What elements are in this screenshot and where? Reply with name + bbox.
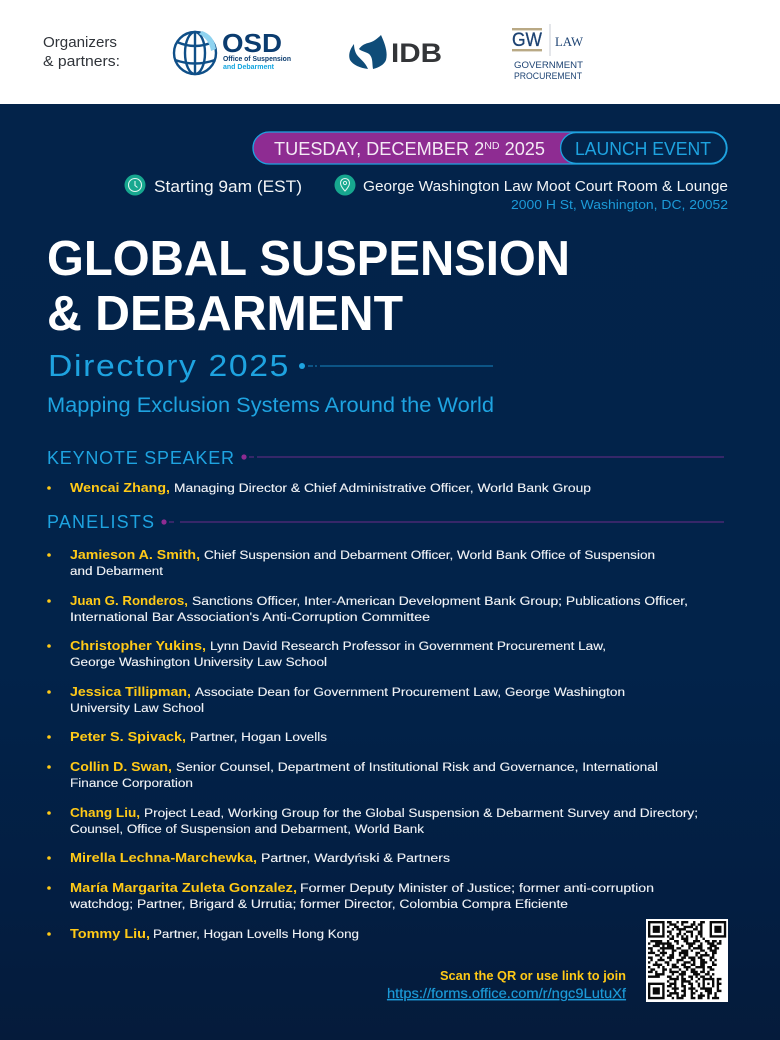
panelist: Mirella Lechna-Marchewka: [47, 851, 450, 865]
panelist: Christopher Yukins: [47, 639, 606, 669]
panelist: Jamieson A. Smith: [47, 548, 655, 578]
panelist: Tommy Liu: Partner, Hogan Lovells Hong Kong: [153, 927, 359, 941]
panelist: Collin D. Swan: Collin D. Swan,: [70, 760, 172, 774]
logo: OSD: and Debarment: [223, 62, 274, 71]
panelist: Peter S. Spivack: Peter S. Spivack,: [70, 730, 186, 744]
panelist: Juan G. Ronderos: International Bar Association's Anti-Corruption Committee: [70, 610, 430, 624]
logo: GW Law Government Procurement: GOVERNMENT: [514, 60, 583, 71]
panelist: Tommy Liu: Tommy Liu,: [70, 927, 150, 941]
panelist: Juan G. Ronderos: Juan G. Ronderos,: [70, 594, 188, 608]
logo: GW Law Government Procurement: PROCUREMENT: [514, 71, 582, 82]
panelist: Jamieson A. Smith: and Debarment: [70, 564, 164, 578]
venue: George Washington Law Moot Court Room & Lounge: [363, 178, 728, 195]
panelist: Juan G. Ronderos: [47, 594, 688, 624]
panelist: Christopher Yukins: Lynn David Research Professor in Government Procurement Law,: [210, 639, 606, 653]
keynote entry: Managing Director & Chief Administrative Officer, World Bank Group: [174, 481, 591, 495]
heading: panelists: PANELISTS: [47, 512, 154, 532]
subtitle: directory 2025: [48, 348, 493, 383]
panelist: Chang Liu: Project Lead, Working Group for the Global Suspension & Debarment Survey and Directory;: [144, 806, 698, 820]
panelist: Juan G. Ronderos: Sanctions Officer, Inter-American Development Bank Group; Publications Officer,: [192, 594, 688, 608]
logo: IDB: [349, 35, 442, 69]
organizers label: Organizers: [43, 35, 117, 51]
organizers label: & partners:: [43, 54, 120, 70]
call to action: https://forms.office.com/r/ngc9LutuXf: [387, 985, 626, 1001]
panelist: Chang Liu: Chang Liu,: [70, 806, 140, 820]
logo: OSD: Office of Suspension: [223, 54, 291, 63]
panelist: Peter S. Spivack: [47, 730, 327, 744]
panelist: María Margarita Zuleta Gonzalez: María Margarita Zuleta Gonzalez,: [70, 881, 297, 895]
date and launch pill: LAUNCH EVENT: [575, 139, 711, 159]
date and launch pill: TUESDAY, DECEMBER 2: [274, 139, 482, 159]
panelist: María Margarita Zuleta Gonzalez: watchdog; Partner, Brigard & Urrutia; former Director, Colombia Compra Eficiente: [69, 897, 568, 911]
logo: IDB: IDB: [391, 38, 442, 68]
panelist: Chang Liu: Counsel, Office of Suspension and Debarment, World Bank: [70, 822, 425, 836]
panelist: Jessica Tillipman: University Law School: [70, 701, 204, 715]
panelist: Mirella Lechna-Marchewka: Partner, Wardyński & Partners: [261, 851, 450, 865]
panelist: Peter S. Spivack: Partner, Hogan Lovells: [190, 730, 327, 744]
icon: clock: [124, 174, 146, 196]
panelist: Christopher Yukins: Christopher Yukins,: [70, 639, 206, 653]
venue: [334, 174, 728, 212]
tagline: Mapping Exclusion Systems Around the World: [47, 394, 494, 417]
panelist: Mirella Lechna-Marchewka: Mirella Lechna-Marchewka,: [70, 851, 257, 865]
panelist: Jamieson A. Smith: Jamieson A. Smith,: [70, 548, 200, 562]
panelist: Christopher Yukins: George Washington University Law School: [70, 655, 327, 669]
logo: GW Law Government Procurement: LAW: [555, 35, 583, 49]
panelist: Tommy Liu: [47, 927, 359, 941]
panelist: Jessica Tillipman: Jessica Tillipman,: [70, 685, 191, 699]
logo: OSD: OSD: [222, 28, 282, 58]
logo: GW Law Government Procurement: GW: [512, 30, 542, 51]
organizers label: [43, 35, 120, 70]
panelist: Jessica Tillipman: Associate Dean for Government Procurement Law, George Washington: [195, 685, 625, 699]
panelist: Collin D. Swan: Senior Counsel, Department of Institutional Risk and Governance, International: [176, 760, 658, 774]
heading: keynote speaker: [47, 448, 724, 468]
call to action: Scan the QR or use link to join: [440, 969, 626, 983]
panelist: Jessica Tillipman: [47, 685, 625, 715]
panelist: María Margarita Zuleta Gonzalez: [47, 881, 654, 911]
keynote entry: [47, 481, 591, 495]
title: GLOBAL SUSPENSION: [47, 232, 570, 286]
panelist: Chang Liu: [47, 806, 698, 836]
icon: map pin: [334, 174, 356, 196]
panel: partner header: [0, 0, 780, 104]
subtitle: directory 2025: Directory 2025: [48, 348, 290, 383]
heading: panelists: [47, 512, 724, 532]
panelist: María Margarita Zuleta Gonzalez: Former Deputy Minister of Justice; former anti-corruption: [300, 881, 654, 895]
panelist: Collin D. Swan: [47, 760, 658, 790]
title: & DEBARMENT: [47, 287, 403, 341]
call to action: [387, 969, 626, 1001]
date and launch pill: ND: [484, 140, 500, 152]
time: Starting 9am (EST): [154, 177, 302, 196]
title: [47, 232, 570, 341]
logo: OSD: [174, 28, 291, 74]
venue: 2000 H St, Washington, DC, 20052: [511, 197, 728, 212]
panelist list: [47, 548, 698, 941]
panelist: Collin D. Swan: Finance Corporation: [70, 776, 193, 790]
panelist: Jamieson A. Smith: Chief Suspension and Debarment Officer, World Bank Office of Suspension: [204, 548, 655, 562]
logo: GW Law Government Procurement: [512, 24, 583, 82]
date and launch pill: [253, 132, 727, 164]
date and launch pill: 2025: [500, 139, 545, 159]
QR code: [646, 919, 728, 1002]
keynote entry: Wencai Zhang,: [70, 481, 170, 495]
heading: keynote speaker: KEYNOTE SPEAKER: [47, 448, 234, 468]
